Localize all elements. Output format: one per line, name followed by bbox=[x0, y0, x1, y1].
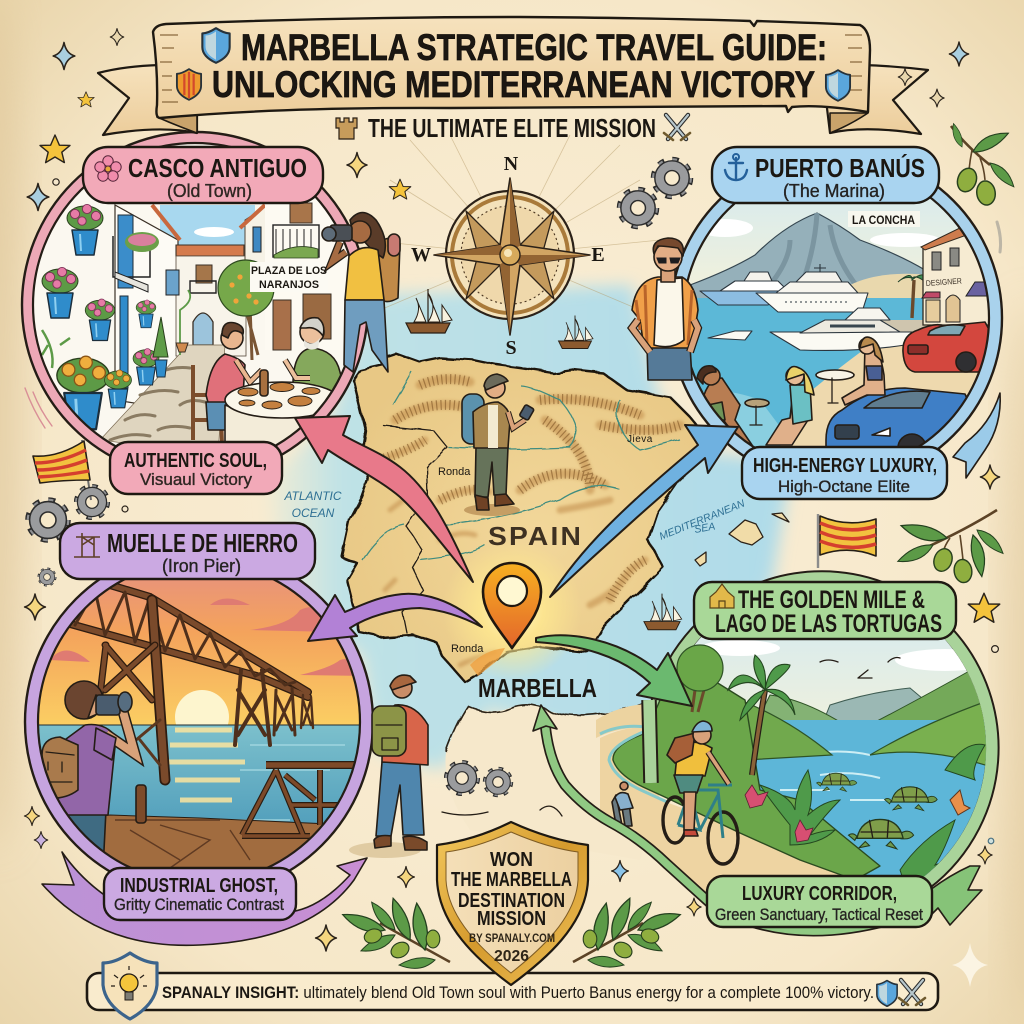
figure: man in sunglasses bbox=[632, 238, 698, 380]
pill: Casco Antiguo header: (Old Town) bbox=[167, 181, 252, 201]
panel: Golden Mile and Lago bbox=[650, 578, 1000, 920]
Balearic islands bbox=[695, 513, 789, 566]
photographer from behind bbox=[42, 681, 135, 870]
arrow: to Muelle de Hierro bbox=[308, 594, 482, 641]
gears top right bbox=[621, 161, 689, 225]
pill: Golden Mile header: LAGO DE LAS TORTUGAS bbox=[715, 610, 942, 638]
ribbon: purple swoosh bbox=[42, 852, 367, 945]
olive branch: bottom left bbox=[340, 896, 450, 971]
pill: Muelle de Hierro caption: Gritty Cinematic Contrast bbox=[114, 895, 284, 914]
designer building: DESIGNER bbox=[926, 276, 962, 288]
pill: Puerto Banús caption: High-Octane Elite bbox=[778, 477, 910, 496]
scene: marina bbox=[688, 198, 988, 446]
map pin bbox=[483, 563, 541, 648]
sandy cycling road bbox=[600, 727, 870, 905]
gears left bbox=[30, 488, 106, 584]
turtles bbox=[816, 773, 937, 849]
title text bbox=[212, 26, 827, 105]
flag: right bbox=[818, 514, 876, 568]
ribbon: green up-sweep bbox=[533, 705, 935, 931]
panel: Puerto Banús bbox=[676, 186, 1004, 457]
map pin glow bbox=[442, 540, 582, 680]
ribbon: blue tail bbox=[953, 393, 1000, 478]
tree and palm bbox=[677, 645, 795, 775]
arrow: to Golden Mile bbox=[536, 635, 692, 706]
olive branch: right bbox=[896, 510, 1007, 584]
compass letters: E bbox=[591, 244, 605, 266]
label: Atlantic Ocean: ATLANTIC bbox=[283, 489, 342, 503]
palm tree bbox=[898, 274, 922, 318]
badge text: DESTINATION bbox=[458, 890, 565, 912]
badge text: THE MARBELLA bbox=[451, 869, 572, 891]
pill: Muelle de Hierro caption bbox=[104, 868, 296, 920]
figure: woman photographer bbox=[322, 212, 400, 372]
pill: Puerto Banús header bbox=[712, 147, 939, 203]
stream along road bbox=[600, 726, 667, 802]
pill: Golden Mile header: THE GOLDEN MILE & bbox=[738, 586, 925, 614]
figure: explorer on map bbox=[462, 374, 534, 516]
label: Mediterranean Sea: MEDITERRANEAN bbox=[658, 497, 747, 543]
victory shield badge bbox=[437, 822, 588, 985]
plaza signpost text bbox=[250, 262, 328, 292]
cyclist bbox=[663, 721, 738, 864]
scene: lake bbox=[694, 637, 986, 876]
title banner bbox=[98, 17, 928, 135]
compass rose bbox=[434, 178, 590, 335]
banner left tail bbox=[98, 65, 197, 135]
ring: green frame bbox=[652, 578, 992, 918]
map borders bbox=[383, 425, 447, 633]
label: Atlantic Ocean: OCEAN bbox=[292, 506, 335, 520]
pill: Casco Antiguo caption bbox=[110, 442, 282, 494]
title shields bbox=[177, 28, 850, 101]
pill: Casco Antiguo header: CASCO ANTIGUO bbox=[128, 153, 307, 183]
ribbon: green tail bbox=[930, 866, 982, 925]
pill: Muelle de Hierro caption: INDUSTRIAL GHOST, bbox=[120, 875, 278, 897]
badge text: 2026 bbox=[494, 948, 529, 965]
pill: Muelle de Hierro header: (Iron Pier) bbox=[162, 556, 241, 576]
compass rays bbox=[365, 135, 660, 310]
banner body bbox=[153, 17, 870, 118]
pill: Golden Mile caption: Green Sanctuary, Tactical Reset bbox=[715, 905, 923, 924]
dining couple bbox=[191, 316, 341, 444]
compass letters: W bbox=[411, 244, 431, 266]
title text: UNLOCKING MEDITERRANEAN VICTORY bbox=[212, 63, 815, 105]
motion lines bbox=[25, 222, 1001, 428]
beach table group bbox=[697, 337, 885, 450]
decor: broken gears on the sand bbox=[442, 764, 562, 816]
compass letters: N bbox=[504, 153, 519, 175]
pill: Puerto Banús header: (The Marina) bbox=[783, 181, 885, 201]
sailing ships bbox=[406, 289, 682, 630]
pill: Casco Antiguo caption: Visuaul Victory bbox=[140, 470, 252, 489]
label: Mediterranean Sea: SEA bbox=[693, 520, 716, 536]
pill: Puerto Banús caption: HIGH-ENERGY LUXURY, bbox=[753, 455, 937, 477]
pill: Casco Antiguo header bbox=[83, 147, 323, 203]
icon: lightbulb shield bbox=[103, 953, 157, 1019]
arrow: to Puerto Banús bbox=[550, 425, 738, 597]
wooden railing bbox=[242, 765, 360, 836]
map of Spain bbox=[342, 353, 700, 682]
map terrain shading bbox=[380, 379, 680, 665]
map terrain hatching bbox=[380, 379, 680, 600]
badge text: WON bbox=[490, 849, 533, 871]
figure: hiker in red shirt bbox=[349, 675, 428, 858]
badge text bbox=[451, 849, 572, 965]
La Concha tag: LA CONCHA bbox=[852, 213, 915, 227]
sea behind the map bbox=[268, 285, 792, 770]
title text: MARBELLA STRATEGIC TRAVEL GUIDE: bbox=[241, 26, 827, 68]
map place labels: Ronda bbox=[438, 466, 471, 478]
pill: Casco Antiguo caption: AUTHENTIC SOUL, bbox=[124, 450, 267, 472]
distant walker figure bbox=[612, 782, 633, 826]
plaza signpost text: NARANJOS bbox=[259, 279, 319, 291]
badge text: MISSION bbox=[477, 908, 546, 930]
tropical plants bbox=[745, 770, 840, 845]
banner folds bbox=[157, 113, 868, 133]
pill: Puerto Banús header: PUERTO BANÚS bbox=[755, 153, 925, 183]
southern coastline land bbox=[446, 703, 660, 860]
green hillside bbox=[613, 672, 880, 880]
pill: Muelle de Hierro header bbox=[60, 523, 315, 579]
subtitle: THE ULTIMATE ELITE MISSION bbox=[368, 113, 656, 143]
map place labels: Jieva bbox=[627, 434, 653, 445]
label: MARBELLA: MARBELLA bbox=[478, 673, 597, 703]
panel: Casco Antiguo bbox=[20, 130, 370, 480]
pill: Muelle de Hierro header: MUELLE DE HIERRO bbox=[107, 528, 298, 558]
pill: Puerto Banús caption bbox=[742, 447, 947, 499]
plaza signpost text: PLAZA DE LOS bbox=[251, 265, 327, 277]
ring segment over hillside bbox=[649, 700, 651, 783]
label: Atlantic Ocean bbox=[283, 489, 342, 520]
compass letters: S bbox=[505, 337, 517, 359]
red car bbox=[903, 322, 1000, 372]
compass letters bbox=[411, 153, 605, 359]
pier trestle bbox=[63, 582, 313, 780]
yachts bbox=[700, 264, 920, 350]
arrow: to Casco Antiguo bbox=[295, 416, 473, 582]
map rivers bbox=[362, 372, 680, 560]
designer building bbox=[920, 228, 988, 326]
map place labels: Ronda bbox=[451, 643, 484, 655]
orange tree bbox=[218, 260, 274, 360]
pill: Golden Mile header bbox=[694, 582, 956, 639]
flower pots bbox=[42, 204, 190, 429]
map place labels bbox=[438, 434, 653, 655]
banner right tail bbox=[826, 65, 928, 134]
pill: Golden Mile caption: LUXURY CORRIDOR, bbox=[742, 883, 897, 905]
panel: Muelle de Hierro bbox=[24, 579, 374, 872]
blue car bbox=[825, 387, 966, 446]
badge text: BY SPANALY.COM bbox=[469, 931, 555, 945]
insight bar: SPANALY INSIGHT: ultimately blend Old Town soul with Puerto Banus energy for a complete 100% victory. bbox=[162, 983, 874, 1002]
flag: left bbox=[33, 440, 91, 500]
pill: Golden Mile caption bbox=[707, 876, 932, 927]
label: SPAIN: SPAIN bbox=[488, 521, 583, 551]
scene: pier at sunset bbox=[39, 580, 359, 867]
insight bar bbox=[87, 973, 938, 1010]
olive branch: top right bbox=[950, 122, 1018, 206]
scene: Old Town street bbox=[34, 144, 348, 445]
olive branch: bottom right bbox=[573, 896, 682, 969]
